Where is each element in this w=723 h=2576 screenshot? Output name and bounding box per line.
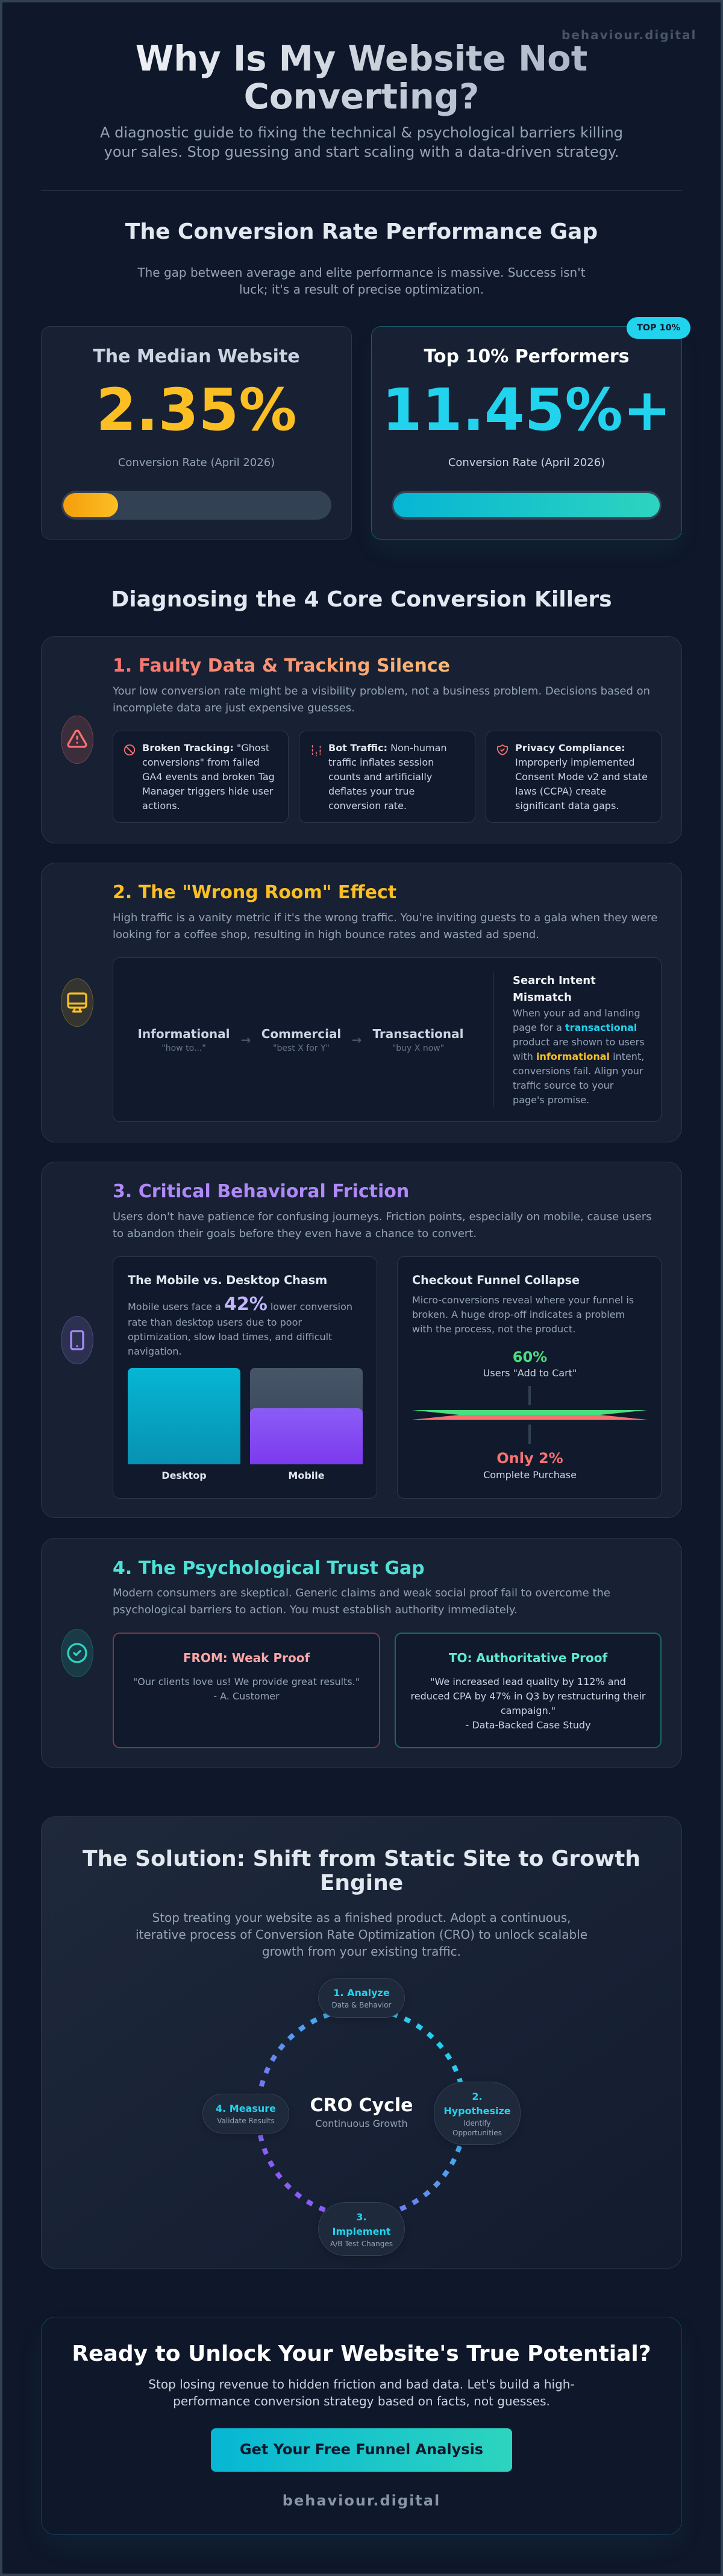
text: faulty data <box>113 685 650 714</box>
median heading: The Median Website <box>93 346 300 367</box>
median progress bar <box>61 491 331 520</box>
median label: Conversion Rate (April 2026) <box>118 456 275 469</box>
icon: ban <box>124 744 135 756</box>
text: privacy compliance: significant data gaps. <box>515 800 619 811</box>
label: complete purchase: Complete Purchase <box>483 1469 577 1481</box>
top performers progress bar <box>392 491 662 520</box>
sub-panel: search intent: Informational <box>137 1027 230 1041</box>
panel: median website <box>41 326 352 540</box>
node: hypothesize: 2. <box>472 2091 483 2102</box>
text: with the process, not the product. <box>412 1323 575 1335</box>
quote <box>411 1676 646 1731</box>
text: privacy compliance: Improperly implemented <box>515 757 634 768</box>
text continued <box>128 1317 332 1357</box>
label: desktop: Desktop <box>161 1470 207 1481</box>
text: trust gap <box>113 1587 610 1616</box>
text continued: navigation. <box>128 1346 182 1357</box>
text: behavioral friction <box>113 1211 652 1240</box>
text: trust gap: psychological barriers to action. You must establish authority immediately. <box>113 1604 518 1616</box>
label: mobile: Mobile <box>288 1470 325 1481</box>
heading: faulty data: 1. Faulty Data & Tracking Silence <box>113 655 450 676</box>
top performers label: Conversion Rate (April 2026) <box>448 456 605 469</box>
heading: trust gap: 4. The Psychological Trust Gap <box>113 1558 425 1579</box>
bar: mobile <box>250 1368 363 1464</box>
text: broken tracking <box>142 742 275 811</box>
panel: solution <box>41 1816 682 2269</box>
sublabel: "best X for Y" <box>273 1044 330 1053</box>
node: measure: 4. Measure <box>216 2103 276 2114</box>
node: hypothesize: Identify <box>463 2119 491 2127</box>
flow: transactional <box>372 1027 464 1053</box>
text <box>412 1294 634 1335</box>
panel: behavioral friction <box>41 1162 682 1518</box>
text: trust gap: Modern consumers are skeptical. Generic claims and weak social proof fail to overcome the <box>113 1587 610 1599</box>
text continued: rate than desktop users due to poor <box>128 1317 302 1328</box>
node: implement: Implement <box>333 2226 390 2237</box>
text: broken tracking: actions. <box>142 800 180 811</box>
text: faulty data: incomplete data are just expensive guesses. <box>113 702 355 714</box>
top performers heading: Top 10% Performers <box>424 346 630 367</box>
heading: solution: Engine <box>320 1871 403 1895</box>
bar: desktop <box>128 1368 240 1464</box>
flow: informational <box>137 1027 230 1053</box>
quote <box>133 1676 360 1702</box>
text: broken tracking: Broken Tracking: "Ghost <box>142 742 269 754</box>
sub-panel: search intent: Transactional <box>372 1027 464 1041</box>
node: analyze: 1. Analyze <box>333 1987 390 1998</box>
panel: trust gap <box>41 1538 682 1768</box>
node: analyze <box>318 1978 405 2018</box>
callout text: page for a transactional <box>513 1022 637 1033</box>
node: implement: 3. <box>356 2211 367 2223</box>
text: bot traffic: Bot Traffic: Non-human <box>328 742 447 754</box>
callout text: with informational intent, <box>513 1051 644 1062</box>
brand footer: behaviour.digital <box>283 2492 440 2509</box>
cycle centre subtitle: Continuous Growth <box>315 2118 408 2129</box>
icon: check circle <box>61 1629 93 1677</box>
flow: commercial <box>261 1027 341 1053</box>
node: hypothesize: Hypothesize <box>443 2105 511 2117</box>
subtitle <box>100 124 623 160</box>
heading: wrong room: 2. The "Wrong Room" Effect <box>113 882 396 903</box>
text: wrong room: High traffic is a vanity metric if it's the wrong traffic. You're inviting guests to a gala when they were <box>113 912 657 924</box>
text: broken. A huge drop-off indicates a problem <box>412 1309 625 1320</box>
panel: faulty data <box>41 636 682 843</box>
quote: "We increased lead quality by 112% and <box>430 1676 626 1687</box>
top performers value: 11.45%+ <box>382 376 671 444</box>
text: Micro-conversions reveal where your funnel is <box>412 1294 634 1306</box>
text: broken tracking: GA4 events and broken Tag <box>142 771 275 783</box>
text: solution <box>136 1910 587 1959</box>
text: solution: Stop treating your website as a finished product. Adopt a continuous, <box>152 1910 571 1925</box>
text with 42% stat: Mobile users face a 42% lower conversion <box>128 1294 352 1315</box>
callout text: product are shown to users <box>513 1036 645 1048</box>
text: bot traffic: deflates your true <box>328 786 415 797</box>
text: bot traffic: counts and artificially <box>328 771 432 783</box>
heading: call to action: Ready to Unlock Your Website's True Potential? <box>72 2341 651 2366</box>
label: add to cart: Users "Add to Cart" <box>483 1367 577 1379</box>
text: privacy compliance <box>515 742 648 811</box>
cycle centre title: CRO Cycle <box>310 2095 413 2116</box>
sublabel: "buy X now" <box>392 1044 444 1053</box>
badge: top 10%: TOP 10% <box>637 323 680 333</box>
text: behavioral friction: to abandon their goals before they even have a chance to convert. <box>113 1227 477 1240</box>
arrow: → <box>241 1033 251 1047</box>
sub-panel: authoritative proof <box>395 1633 662 1748</box>
panel: wrong room <box>41 863 682 1142</box>
sub-panel: broken tracking <box>113 731 289 823</box>
stat: 60%: 60% <box>513 1349 547 1365</box>
section intro text: luck; it's a result of precise optimization. <box>239 282 484 297</box>
quote: - Data-Backed Case Study <box>465 1719 591 1731</box>
sub-panel: search intent <box>113 957 662 1122</box>
sub-panel: search intent: Commercial <box>261 1027 341 1041</box>
text: solution: iterative process of Conversion Rate Optimization (CRO) to unlock scalable <box>136 1927 587 1942</box>
sub-heading: Checkout Funnel Collapse <box>412 1273 580 1287</box>
text: faulty data: Your low conversion rate might be a visibility problem, not a business problem. Decisions based on <box>113 685 650 698</box>
title <box>41 40 682 116</box>
text: solution: growth from your existing traffic. <box>262 1944 461 1959</box>
stat: only 2%: Only 2% <box>496 1450 563 1467</box>
text: bot traffic: conversion rate. <box>328 800 407 811</box>
icon: shield check <box>496 744 509 755</box>
text continued: optimization, slow load times, and difficult <box>128 1331 332 1343</box>
text: privacy compliance: laws (CCPA) create <box>515 786 606 797</box>
callout heading: Mismatch <box>513 991 572 1004</box>
icon: warning triangle <box>61 716 93 764</box>
bar fill: mobile <box>250 1408 363 1464</box>
heading: TO: Authoritative Proof <box>449 1651 607 1665</box>
sublabel: "how to..." <box>161 1044 206 1053</box>
heading: performance gap: The Conversion Rate Performance Gap <box>125 219 598 244</box>
section intro text: The gap between average and elite performance is massive. Success isn't <box>137 265 586 280</box>
funnel bottom <box>412 1415 647 1420</box>
node: implement <box>318 2202 405 2256</box>
heading: behavioral friction: 3. Critical Behavioral Friction <box>113 1181 409 1202</box>
title: Why Is My Website Not <box>136 39 587 79</box>
heading: solution: The Solution: Shift from Static Site to Growth <box>83 1847 640 1871</box>
sub-panel: mobile vs desktop <box>113 1256 377 1499</box>
chart: CRO cycle ring <box>257 2014 463 2212</box>
panel: top 10% performers <box>371 326 682 540</box>
callout text: When your ad and landing <box>513 1007 640 1019</box>
node: implement: A/B Test Changes <box>330 2240 393 2248</box>
text: bot traffic: traffic inflates session <box>328 757 434 768</box>
button: Get Your Free Funnel Analysis <box>240 2441 483 2458</box>
text: bot traffic <box>328 742 447 811</box>
icon: phone <box>61 1316 93 1364</box>
callout text <box>513 1007 645 1106</box>
quote: reduced CPA by 47% in Q3 by restructuring their <box>411 1690 645 1702</box>
heading: core conversion killers: Diagnosing the 4 Core Conversion Killers <box>111 587 612 612</box>
quote: "Our clients love us! We provide great results." <box>133 1676 360 1687</box>
title: Converting? <box>244 77 479 117</box>
callout heading <box>513 974 596 1004</box>
brand watermark: behaviour.digital <box>562 28 696 42</box>
callout text: traffic source to your <box>513 1080 613 1091</box>
callout heading: Search Intent <box>513 974 596 987</box>
node: measure <box>202 2094 289 2134</box>
section intro text <box>137 265 586 297</box>
button <box>211 2428 512 2472</box>
heading: solution <box>83 1847 640 1895</box>
subtitle: A diagnostic guide to fixing the technical & psychological barriers killing <box>100 124 623 141</box>
text: wrong room <box>113 912 657 941</box>
sub-panel: privacy compliance <box>486 731 662 823</box>
heading: FROM: Weak Proof <box>183 1651 310 1665</box>
badge: top 10% <box>627 317 690 339</box>
text: call to action <box>148 2377 575 2408</box>
panel: call to action <box>41 2317 682 2535</box>
callout text: conversions fail. Align your <box>513 1065 643 1077</box>
sub-panel: weak proof <box>113 1633 380 1748</box>
text: privacy compliance: Privacy Compliance: <box>515 742 625 754</box>
sub-panel: checkout funnel <box>397 1256 662 1499</box>
text: wrong room: looking for a coffee shop, resulting in high bounce rates and wasted ad spend. <box>113 928 539 941</box>
text: privacy compliance: Consent Mode v2 and state <box>515 771 648 783</box>
icon: bot traffic <box>312 745 321 756</box>
node: analyze: Data & Behavior <box>332 2001 391 2009</box>
funnel top <box>412 1410 647 1415</box>
text: broken tracking: conversions" from failed <box>142 757 260 768</box>
node: hypothesize <box>434 2082 521 2145</box>
quote: - A. Customer <box>213 1690 280 1702</box>
text: call to action: Stop losing revenue to hidden friction and bad data. Let's build a high- <box>148 2377 575 2392</box>
text: broken tracking: Manager triggers hide user <box>142 786 273 797</box>
node: hypothesize: Opportunities <box>452 2129 502 2137</box>
median value: 2.35% <box>96 376 297 444</box>
text: call to action: performance conversion strategy based on facts, not guesses. <box>173 2394 550 2408</box>
callout text: page's promise. <box>513 1094 589 1106</box>
sub-panel: bot traffic <box>299 731 475 823</box>
sub-heading: The Mobile vs. Desktop Chasm <box>128 1273 327 1287</box>
subtitle: your sales. Stop guessing and start scaling with a data-driven strategy. <box>104 143 619 160</box>
text: behavioral friction: Users don't have patience for confusing journeys. Friction points, especially on mobile, cause users <box>113 1211 652 1223</box>
arrow: → <box>352 1033 362 1047</box>
quote: campaign." <box>501 1705 556 1716</box>
icon: monitor <box>61 978 93 1027</box>
node: measure: Validate Results <box>217 2117 275 2125</box>
